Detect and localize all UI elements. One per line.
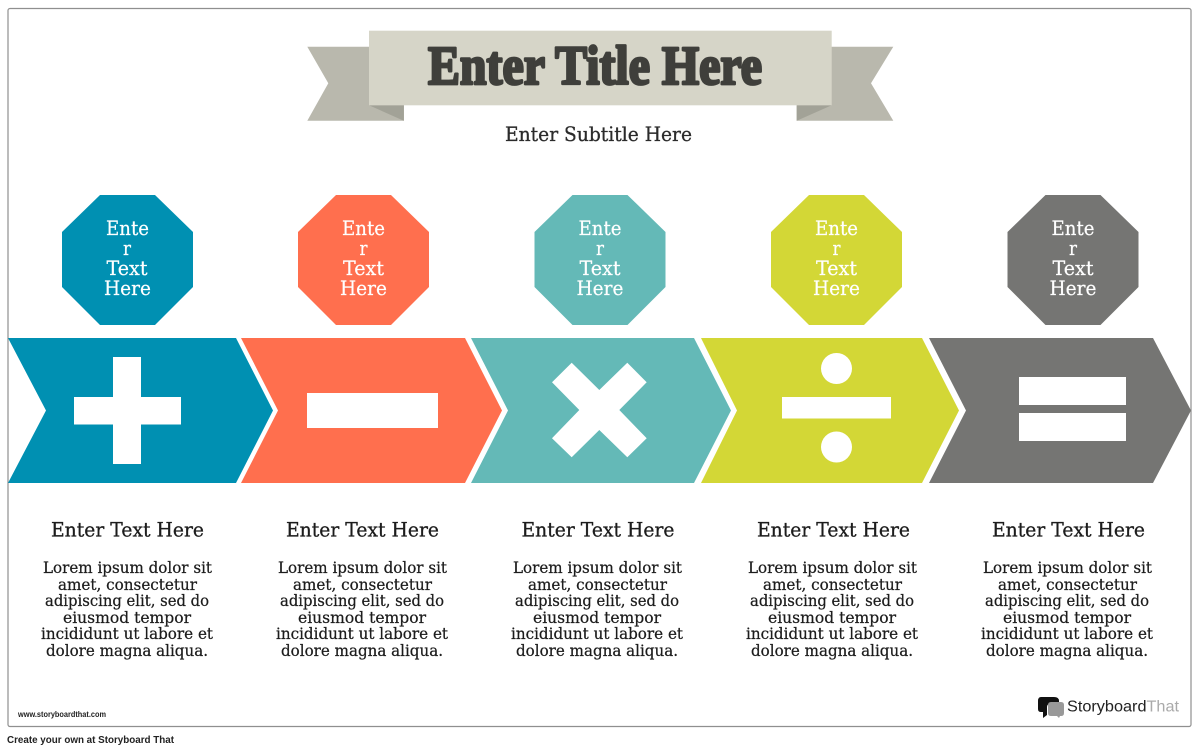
column 5 body: dolore magna aliqua.	[986, 641, 1148, 660]
octagon 5: r	[1069, 236, 1077, 260]
octagon 1	[62, 195, 193, 325]
octagon 2: Ente	[342, 216, 385, 240]
octagon 1: Text	[106, 256, 148, 280]
column 5 body: eiusmod tempor	[1003, 608, 1131, 627]
icon: division sign	[782, 353, 891, 462]
arrow 3: multiply	[471, 338, 731, 483]
column 2 body: dolore magna aliqua.	[281, 641, 443, 660]
column 3 body: eiusmod tempor	[533, 608, 661, 627]
column 4 body: adipiscing elit, sed do	[750, 591, 914, 610]
octagon 3: r	[596, 236, 604, 260]
column 3 body: dolore magna aliqua.	[516, 641, 678, 660]
column 1 text	[41, 518, 214, 660]
column 5 heading: Enter Text Here	[992, 518, 1145, 542]
octagon 2: Text	[343, 256, 384, 280]
column 5 body: adipiscing elit, sed do	[985, 591, 1149, 610]
octagon 2: Here	[340, 276, 387, 300]
column 5 body: amet, consectetur	[998, 575, 1137, 594]
octagon 5: Ente	[1052, 216, 1094, 240]
column 1 body: Lorem ipsum dolor sit	[43, 558, 213, 577]
column 1 body: amet, consectetur	[58, 575, 197, 594]
column 5 body: Lorem ipsum dolor sit	[983, 558, 1153, 577]
octagon 1: r	[123, 236, 131, 260]
logo: StoryboardThat	[1038, 697, 1180, 718]
column 4 body: amet, consectetur	[763, 575, 902, 594]
column 2 body: adipiscing elit, sed do	[280, 591, 444, 610]
octagon 3: Ente	[578, 216, 622, 240]
column 1 body: adipiscing elit, sed do	[45, 591, 209, 610]
banner right fold	[797, 105, 832, 121]
icon: minus sign	[307, 393, 438, 428]
banner left fold	[369, 105, 404, 121]
column 2 heading: Enter Text Here	[286, 518, 439, 542]
arrow 4: divide	[701, 338, 959, 483]
arrow 2: minus	[241, 338, 502, 483]
column 2 body: amet, consectetur	[293, 575, 432, 594]
column 1 body: incididunt ut labore et	[41, 624, 214, 643]
title: Enter Title Here	[428, 35, 762, 96]
logo wordmark: StoryboardThat	[1067, 698, 1180, 716]
octagon 2	[298, 195, 429, 325]
column 1 body: eiusmod tempor	[63, 608, 191, 627]
column 2 body: eiusmod tempor	[298, 608, 426, 627]
title banner	[307, 31, 893, 121]
banner main panel	[369, 31, 832, 105]
icon: multiplication sign	[552, 363, 647, 457]
arrow 5: equals	[929, 338, 1191, 483]
octagon 1: Here	[104, 276, 151, 300]
octagon 4	[771, 195, 902, 325]
octagon 3	[534, 195, 666, 325]
column 4 body	[746, 558, 919, 660]
icon: plus sign	[74, 357, 181, 464]
column 2 body: incididunt ut labore et	[276, 624, 449, 643]
column 3 body: incididunt ut labore et	[511, 624, 684, 643]
column 2 body: Lorem ipsum dolor sit	[278, 558, 448, 577]
column 4 body: Lorem ipsum dolor sit	[748, 558, 918, 577]
column 1 body	[41, 558, 214, 660]
column 3 body: Lorem ipsum dolor sit	[513, 558, 683, 577]
octagon 4: Ente	[815, 216, 858, 240]
column 5 text	[981, 518, 1154, 660]
column 4 body: incididunt ut labore et	[746, 624, 919, 643]
column 3 body: amet, consectetur	[528, 575, 667, 594]
octagon 5: Here	[1050, 276, 1096, 300]
octagon 1: Ente	[106, 216, 149, 240]
column 5 body: incididunt ut labore et	[981, 624, 1154, 643]
octagon 5	[1008, 195, 1138, 325]
octagon 4: Here	[813, 276, 860, 300]
subtitle: Enter Subtitle Here	[505, 122, 692, 146]
column 3 text	[511, 518, 684, 660]
column 3 heading: Enter Text Here	[522, 518, 674, 542]
column 4 heading: Enter Text Here	[757, 518, 910, 542]
arrow 1: plus	[8, 338, 273, 483]
icon: speech bubbles	[1038, 697, 1064, 718]
website url: www.storyboardthat.com	[17, 710, 106, 719]
banner left tail	[307, 47, 404, 121]
octagon 4: Text	[816, 256, 857, 280]
column 3 body: adipiscing elit, sed do	[515, 591, 679, 610]
column 2 body	[276, 558, 449, 660]
octagon 3: Text	[580, 256, 620, 280]
octagon 3: Here	[576, 276, 624, 300]
column 1 heading: Enter Text Here	[51, 518, 204, 542]
column 2 text	[276, 518, 449, 660]
column 4 body: eiusmod tempor	[768, 608, 896, 627]
column 3 body	[511, 558, 684, 660]
octagon 2: r	[360, 236, 368, 260]
octagon 5: Text	[1052, 256, 1094, 280]
column 4 text	[746, 518, 919, 660]
column 4 body: dolore magna aliqua.	[751, 641, 913, 660]
column 5 body	[981, 558, 1154, 660]
icon: equals sign	[1019, 377, 1126, 441]
footer credit: Create your own at Storyboard That	[7, 735, 175, 746]
banner right tail	[797, 47, 893, 121]
column 1 body: dolore magna aliqua.	[46, 641, 208, 660]
octagon 4: r	[832, 236, 841, 260]
